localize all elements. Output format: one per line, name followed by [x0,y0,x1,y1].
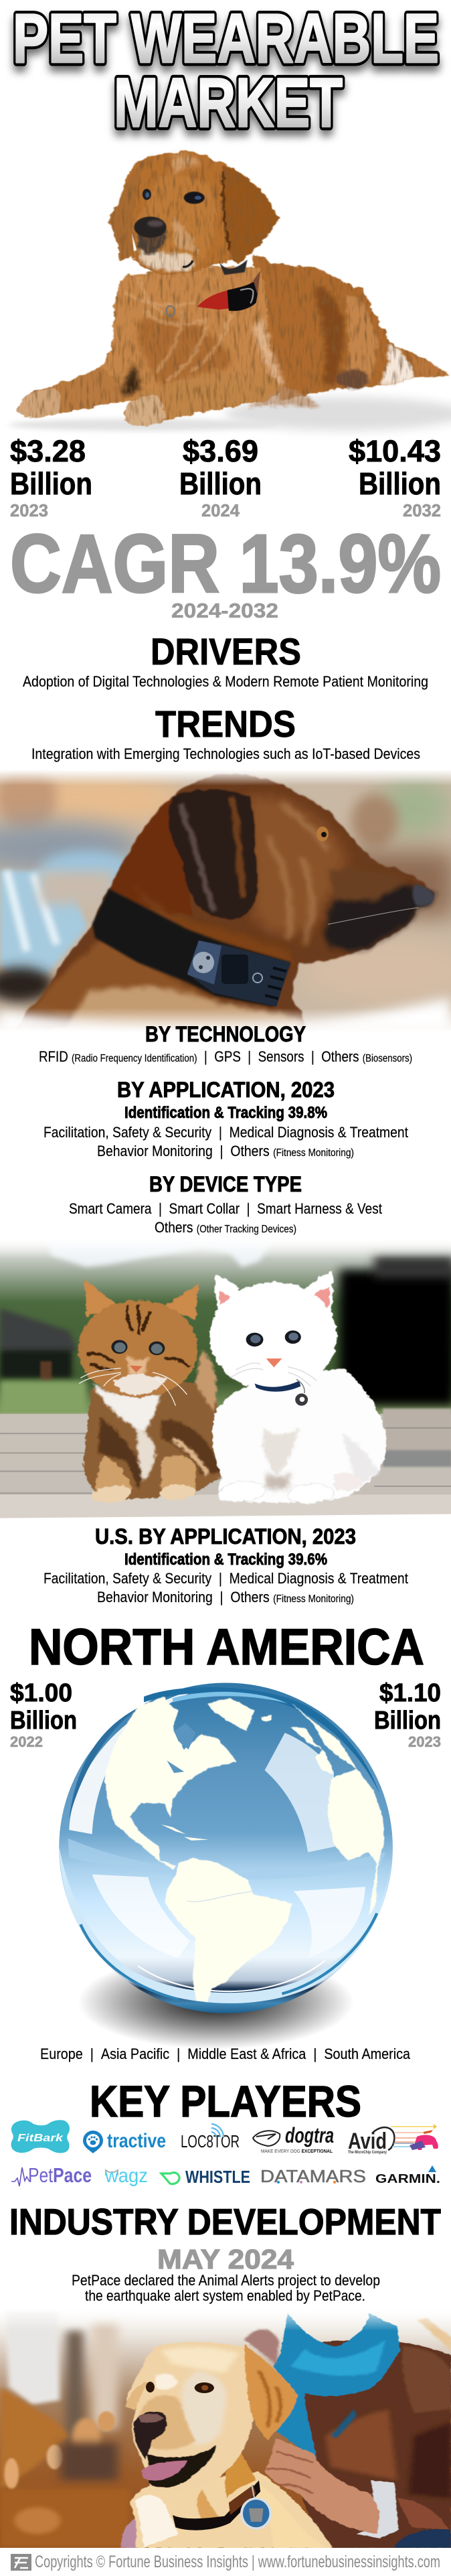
icon: glass globe [59,1683,393,2050]
heading: key players: KEY PLAYERS [90,2076,361,2126]
title: MARKET [114,64,343,142]
stat: 2024 market size: $3.69 [183,434,258,468]
heading: by application: BY APPLICATION, 2023 [117,1078,335,1102]
trends [31,703,420,762]
image: brown dog with smart collar [0,764,451,1032]
heading: by technology: RFID (Radio Frequency Identification) | GPS | Sensors | Others (Biosensors) [39,1048,412,1065]
logo: PetPace: PetPace [28,2163,92,2187]
logo: Loc8tor: LOC8TOR [181,2131,240,2151]
stat: 2023 regional size: Billion [374,1707,441,1735]
stat: 2022 regional size: Billion [10,1707,77,1735]
stat: 2024 market size: Billion [179,466,262,501]
logo: Dogtra [253,2123,334,2154]
stat: 2024 market size: 2024 [201,500,240,520]
heading: U.S. by application: Facilitation, Safety & Security | Medical Diagnosis & Treatment [43,1570,408,1587]
title: MARKET [114,64,343,142]
development text: PetPace declared the Animal Alerts project to develop [72,2272,380,2289]
stat: 2024 market size [179,434,262,520]
icon: Fortune Business Insights logo [11,2554,31,2571]
trends: TRENDS [155,703,296,745]
heading: by device type [69,1172,382,1236]
logo: Whistle [161,2167,250,2187]
stat: 2023 market size: 2023 [10,500,48,520]
heading: by application: Behavior Monitoring | Others (Fitness Monitoring) [97,1143,354,1159]
stat: 2023 regional size [374,1679,441,1750]
stat: 2032 market size: 2032 [403,500,441,520]
image: golden dog with owner [0,2304,451,2548]
logo: Avid: Avid [348,2129,387,2154]
stat: 2022 regional size: 2022 [10,1733,43,1750]
heading: by technology [39,1022,412,1065]
heading: north america: NORTH AMERICA [29,1619,424,1676]
stat: 2022 regional size: $1.00 [10,1679,72,1707]
heading: U.S. by application: Identification & Tracking 39.6% [124,1551,327,1569]
heading: by application [43,1078,408,1159]
logo: Wagz: wagz [104,2165,148,2187]
heading: by application: Identification & Tracking 39.8% [124,1104,327,1122]
image: golden retriever with collar [9,151,451,431]
stat: 2032 market size: Billion [359,466,441,501]
logo: tractive: tractive [107,2130,166,2152]
logo: Dogtra: dogtra [285,2123,334,2147]
logo: Garmin: GARMIN. [375,2171,440,2186]
heading: by technology: BY TECHNOLOGY [145,1022,306,1046]
heading: U.S. by application: U.S. BY APPLICATION, 2023 [95,1524,356,1549]
logo: Loc8tor [181,2124,240,2151]
logo: FitBark [11,2120,70,2153]
stat: 2023 market size [10,434,92,520]
stat: 2023 market size: Billion [10,466,92,501]
heading: by device type: BY DEVICE TYPE [149,1172,302,1196]
logo: FitBark: FitBark [17,2133,64,2144]
logo: Dogtra: MAKE EVERY DOG EXCEPTIONAL [261,2149,333,2154]
regions list: Europe | Asia Pacific | Middle East & Africa | South America [40,2046,411,2062]
logo: tractive [83,2130,166,2153]
stat: 2032 market size [349,434,441,520]
heading: U.S. by application [43,1524,408,1605]
title [13,0,439,142]
development text [72,2272,380,2304]
drivers [23,630,428,690]
stat: 2022 regional size [10,1679,77,1750]
logo: Avid: The MicroChip Company [348,2151,387,2155]
heading: by device type: Smart Camera | Smart Collar | Smart Harness & Vest [69,1200,382,1217]
logo: Garmin [375,2165,440,2186]
heading: by device type: Others (Other Tracking Devices) [155,1219,296,1236]
heading: U.S. by application: Behavior Monitoring | Others (Fitness Monitoring) [97,1589,354,1605]
logo: Avid [348,2124,438,2155]
CAGR figure: 2024-2032 [171,599,278,622]
stat: 2023 market size: $3.28 [10,434,86,468]
logo: Datamars: DATAMARS [260,2167,366,2186]
development text: the earthquake alert system enabled by PetPace. [85,2287,365,2304]
stat: 2023 regional size: $1.10 [379,1679,441,1707]
stat: 2023 regional size: 2023 [408,1733,441,1750]
stat: 2032 market size: $10.43 [349,434,441,468]
drivers: DRIVERS [151,630,301,672]
development date: MAY 2024 [157,2244,294,2275]
image: two kittens [0,1239,451,1525]
logo: Whistle: WHISTLE [185,2167,250,2187]
heading: by application: Facilitation, Safety & Security | Medical Diagnosis & Treatment [43,1124,408,1141]
